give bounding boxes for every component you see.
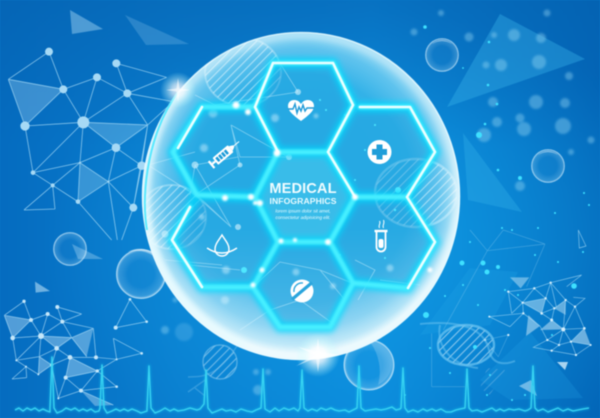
bubble lower left — [116, 249, 166, 298]
icon: pill — [290, 280, 314, 302]
bubble right — [532, 150, 564, 182]
body line one: lorem ipsum dolor sit amet, — [275, 208, 331, 214]
icon: syringe — [208, 138, 242, 169]
bokeh particles background — [161, 10, 594, 395]
ecg heartbeat line — [15, 357, 589, 413]
hexagon honeycomb glow — [172, 63, 435, 327]
icon: medical cross — [368, 140, 392, 164]
network: lower left — [4, 282, 148, 406]
network: upper left — [8, 48, 173, 240]
icon: test tube — [374, 220, 388, 252]
sphere rim highlight — [142, 32, 460, 360]
network lines inside sphere — [148, 60, 420, 330]
bokeh inside sphere — [198, 109, 394, 304]
inner rim soft glow — [146, 33, 458, 301]
glowing joint highlights — [222, 102, 432, 288]
glass sphere — [138, 32, 460, 360]
bubble left — [54, 232, 103, 266]
heading: medical: MEDICAL — [269, 181, 337, 197]
dna inside sphere: right — [375, 159, 457, 227]
bubble bottom — [344, 340, 394, 390]
icon: heart with pulse — [288, 100, 314, 121]
sparkle flare bottom — [296, 333, 340, 377]
translucent triangles top left — [70, 10, 189, 45]
sparkle flare upper left — [160, 72, 196, 108]
dna inside sphere: top — [205, 38, 281, 106]
dna inside sphere: left — [138, 185, 206, 249]
hexagon cell fills — [172, 63, 435, 327]
title text — [269, 181, 337, 220]
icon: water drop — [207, 235, 237, 256]
heading: infographics: INFOGRAPHICS — [269, 196, 337, 206]
bubble top right — [426, 38, 458, 72]
sphere inner content — [138, 36, 457, 356]
glowing cyan sparkles — [404, 25, 590, 401]
DNA helix: lower right — [420, 323, 515, 395]
body line two: consectetur adipisicing elit. — [276, 215, 330, 220]
bubbles — [54, 38, 564, 390]
network: lower right — [432, 230, 592, 387]
DNA helix: bottom centre — [188, 345, 237, 396]
translucent triangles right side — [420, 14, 585, 400]
